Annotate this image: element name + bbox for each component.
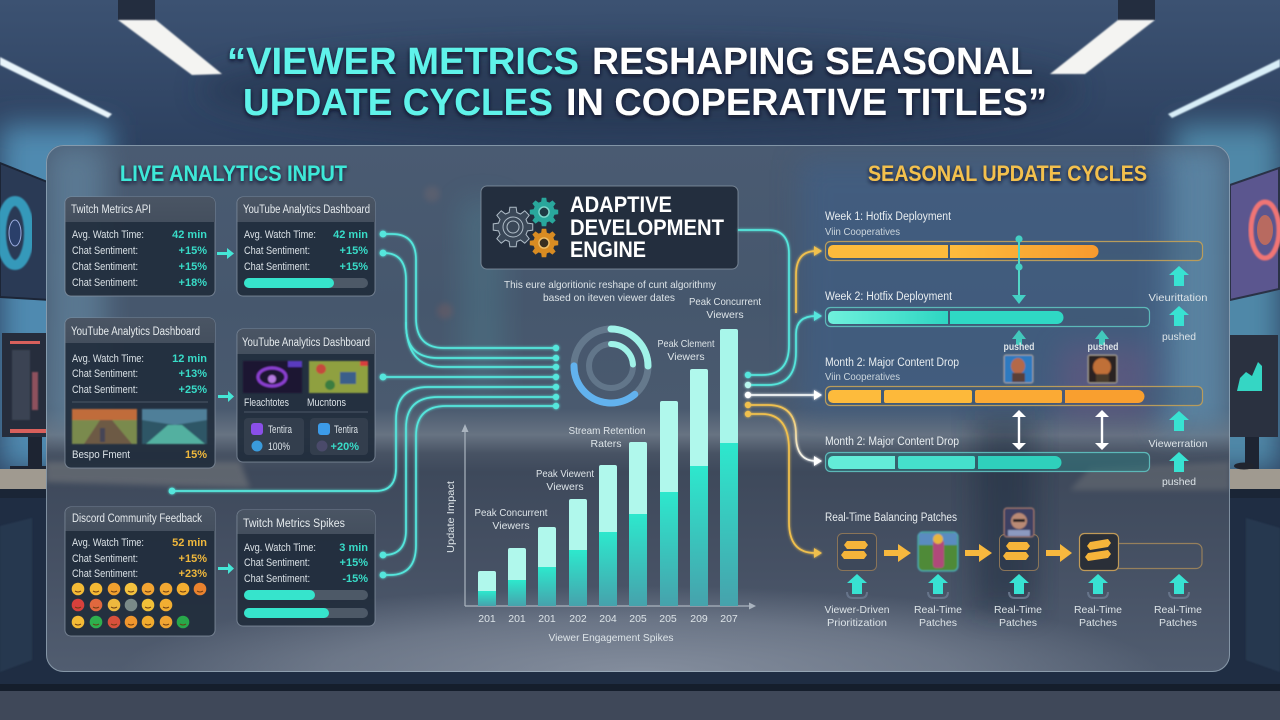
chart tick labels: 207	[720, 613, 738, 625]
bar callout labels: Peak Clement	[658, 338, 715, 350]
timeline: week 1 hotfix deployment: Viin Cooperatives	[825, 226, 900, 238]
main glass panel	[46, 145, 1230, 672]
bar callout labels	[474, 296, 761, 532]
bar callout labels: Peak Viewent	[536, 468, 594, 480]
chart tick labels: 201	[538, 613, 556, 625]
card: YouTube Analytics Dashboard with thumbnails: Chat Sentiment:	[72, 368, 138, 380]
thumbnail: purple vortex	[243, 361, 302, 393]
thumbnail: colourful battlefield	[309, 361, 368, 393]
card: YouTube Analytics Dashboard with progress bar: Chat Sentiment:	[244, 245, 310, 257]
patch label: viewer-driven prioritization: Prioritization	[827, 617, 887, 629]
icon: teal gear	[530, 198, 558, 226]
timeline: week 1 hotfix deployment	[825, 211, 1202, 260]
y axis title: Update Impact	[445, 481, 457, 553]
avatar: orange beast character	[1088, 355, 1117, 383]
bar callout labels: Viewers	[667, 351, 705, 363]
card: Twitch Metrics Spikes: Chat Sentiment:	[244, 573, 310, 585]
card: YouTube Analytics Dashboard with thumbnails	[65, 318, 215, 468]
viewer iteration indicator, lower: pushed	[1162, 476, 1196, 488]
patch flow	[838, 508, 1202, 571]
card: Twitch Metrics API	[65, 197, 215, 296]
title: UPDATE CYCLES	[243, 82, 553, 124]
card: Twitch Metrics Spikes: +15%	[340, 557, 368, 569]
card: Discord Community Feedback with emoji grid: Chat Sentiment:	[72, 553, 138, 565]
bar callout labels: Peak Concurrent	[689, 296, 761, 308]
patch label: real-time patches 4: Real-Time	[1154, 604, 1202, 616]
card: Twitch Metrics API: 42 min	[172, 229, 207, 241]
card: YouTube Analytics Dashboard with progress bar: +15%	[340, 245, 368, 257]
pushed marker with avatar 2	[1088, 330, 1118, 383]
bar callout labels: Viewers	[492, 520, 530, 532]
title: “VIEWER METRICS	[227, 41, 579, 83]
patch label: real-time patches 1	[914, 574, 962, 629]
card: Twitch Metrics Spikes: Twitch Metrics Spikes	[243, 518, 345, 530]
card: Discord Community Feedback with emoji grid: Avg. Watch Time:	[72, 537, 144, 549]
card: Twitch Metrics Spikes: Chat Sentiment:	[244, 557, 310, 569]
arrow: Twitch card to YouTube card	[217, 248, 234, 259]
chart tick labels: 202	[569, 613, 587, 625]
title	[227, 41, 1047, 124]
bar chart: viewer engagement spikes	[445, 296, 761, 644]
engine description: This eure algoritionic reshape of cunt algorithmy	[504, 279, 717, 291]
patch label: real-time patches 4: Patches	[1159, 617, 1197, 629]
title: IN COOPERATIVE TITLES”	[566, 82, 1047, 124]
card: Twitch Metrics Spikes: 3 min	[339, 542, 368, 554]
arrows between steps	[884, 544, 1072, 562]
chart bars	[478, 329, 738, 606]
chart axes	[462, 424, 756, 610]
pushed marker with avatar 1	[1004, 330, 1034, 383]
heading: live analytics input: LIVE ANALYTICS INPUT	[120, 161, 347, 186]
card: YouTube dashboard with media and platform tiles	[237, 329, 375, 462]
timeline: week 2 hotfix deployment: Week 2: Hotfix Deployment	[825, 291, 953, 303]
patch label: viewer-driven prioritization: Viewer-Driven	[824, 604, 890, 616]
bar callout labels: Raters	[591, 438, 621, 450]
tile: right platform stats: Tentira	[334, 424, 359, 436]
chart tick labels: 204	[599, 613, 617, 625]
chart tick labels: 205	[629, 613, 647, 625]
pushed marker with avatar 2: pushed	[1088, 341, 1118, 353]
viewer iteration indicator, top: pushed	[1162, 331, 1196, 343]
card: Discord Community Feedback with emoji grid: +15%	[179, 553, 207, 565]
card: Twitch Metrics API: Chat Sentiment:	[72, 245, 138, 257]
bar callout labels: Viewers	[706, 309, 744, 321]
patch label: real-time patches 2: Real-Time	[994, 604, 1042, 616]
card: YouTube Analytics Dashboard with thumbnails: +25%	[179, 384, 207, 396]
card: YouTube Analytics Dashboard with progress bar	[237, 197, 375, 296]
panel: adaptive development engine: ENGINE	[570, 237, 646, 262]
viewer iteration indicator, top	[1148, 266, 1208, 343]
tile: right platform stats: +20%	[331, 441, 359, 453]
arrow: YouTube card to thumbnail card	[218, 391, 234, 402]
pushed marker with avatar 1: pushed	[1004, 341, 1034, 353]
timeline: month 2 major content drop, teal	[825, 436, 1150, 472]
card: YouTube Analytics Dashboard with thumbnails: YouTube Analytics Dashboard	[71, 326, 200, 338]
bar callout labels: Viewers	[546, 481, 584, 493]
card: Twitch Metrics Spikes	[237, 510, 375, 626]
card: Twitch Metrics API: Avg. Watch Time:	[72, 229, 144, 241]
engine description: based on iteven viewer dates	[543, 292, 675, 304]
card: Twitch Metrics API: Chat Sentiment:	[72, 261, 138, 273]
card: YouTube dashboard with media and platform tiles: Mucntons	[307, 397, 346, 409]
card: Twitch Metrics API: Twitch Metrics API	[71, 204, 151, 216]
engine description	[504, 279, 717, 304]
card: Twitch Metrics API: +15%	[179, 261, 207, 273]
panel: adaptive development engine: DEVELOPMENT	[570, 215, 725, 240]
tile: right platform stats	[310, 418, 368, 455]
step 1: signpost tile	[838, 534, 876, 570]
card: YouTube Analytics Dashboard with progress bar: 42 min	[333, 229, 368, 241]
timeline: week 2 hotfix deployment	[825, 291, 1150, 326]
panel: adaptive development engine: ADAPTIVE	[570, 192, 672, 217]
avatar: blue masked character	[1004, 355, 1033, 383]
timeline: week 1 hotfix deployment: Week 1: Hotfix Deployment	[825, 211, 952, 223]
card: Discord Community Feedback with emoji grid: +23%	[179, 568, 207, 580]
card: Discord Community Feedback with emoji grid	[65, 507, 215, 636]
connector wires: engine to update cycles	[738, 230, 822, 558]
tile: left platform stats	[244, 418, 304, 455]
card: Discord Community Feedback with emoji grid: 52 min	[172, 537, 207, 549]
card: YouTube Analytics Dashboard with progress bar: Chat Sentiment:	[244, 261, 310, 273]
card: Twitch Metrics API: +18%	[179, 277, 207, 289]
x axis title: Viewer Engagement Spikes	[548, 632, 674, 644]
card: Discord Community Feedback with emoji grid: Discord Community Feedback	[72, 513, 202, 525]
viewer iteration indicator, top: Vieurittation	[1148, 292, 1208, 304]
patch label: real-time patches 3: Patches	[1079, 617, 1117, 629]
timeline: month 2 major content drop, orange: Month 2: Major Content Drop	[825, 357, 959, 369]
tile: left platform stats: 100%	[268, 441, 290, 453]
card: YouTube Analytics Dashboard with thumbnails: 12 min	[172, 353, 207, 365]
patch label: real-time patches 3: Real-Time	[1074, 604, 1122, 616]
icon: orange gear	[530, 229, 558, 257]
icon: grey gear	[493, 207, 533, 247]
donut gauge	[559, 314, 663, 418]
title: RESHAPING SEASONAL	[592, 41, 1033, 83]
bar callout labels: Stream Retention	[568, 425, 646, 437]
card: YouTube dashboard with media and platform tiles: Fleachtotes	[244, 397, 289, 409]
chart tick labels: 201	[478, 613, 496, 625]
card: YouTube Analytics Dashboard with thumbnails: Bespo Fment	[72, 449, 130, 461]
heading: real-time balancing patches: Real-Time Balancing Patches	[825, 512, 957, 524]
tile: left platform stats: Tentira	[268, 424, 293, 436]
card: YouTube Analytics Dashboard with progress bar: YouTube Analytics Dashboard	[243, 204, 370, 216]
bar callout labels: Peak Concurrent	[474, 507, 548, 519]
step 2: game scene tile	[918, 532, 958, 571]
patch label: viewer-driven prioritization	[824, 574, 890, 629]
card: YouTube Analytics Dashboard with progress bar: +15%	[340, 261, 368, 273]
thumbnail: tunnel view	[142, 409, 207, 444]
heading: seasonal update cycles: SEASONAL UPDATE CYCLES	[868, 161, 1147, 186]
card: YouTube Analytics Dashboard with thumbnails: +13%	[179, 368, 207, 380]
patch label: real-time patches 2	[994, 574, 1042, 629]
timeline: month 2 major content drop, teal: Month 2: Major Content Drop	[825, 436, 959, 448]
step 3: signpost tile with avatar	[1000, 508, 1038, 570]
connector wires: inputs to engine	[169, 231, 559, 578]
chart tick labels: 201	[508, 613, 526, 625]
card: Twitch Metrics API: +15%	[179, 245, 207, 257]
card: YouTube Analytics Dashboard with thumbnails: Chat Sentiment:	[72, 384, 138, 396]
arrow: week 1 to week 2 link	[1012, 235, 1026, 304]
avatar: sunglasses character	[1004, 508, 1034, 537]
timeline: month 2 major content drop, orange: Viin Cooperatives	[825, 371, 900, 383]
patch label: real-time patches 4	[1154, 574, 1202, 629]
card: YouTube Analytics Dashboard with progress bar: Avg. Watch Time:	[244, 229, 316, 241]
chart tick labels	[478, 613, 738, 625]
card: Twitch Metrics Spikes: -15%	[342, 573, 368, 585]
patch label: real-time patches 3	[1074, 574, 1122, 629]
card: Twitch Metrics Spikes: Avg. Watch Time:	[244, 542, 316, 554]
card: YouTube Analytics Dashboard with thumbnails: 15%	[185, 449, 207, 461]
emoji grid	[72, 583, 206, 628]
chart tick labels: 205	[659, 613, 677, 625]
card: YouTube Analytics Dashboard with thumbnails: Avg. Watch Time:	[72, 353, 144, 365]
viewer iteration indicator, lower: Viewerration	[1148, 438, 1208, 450]
card: Discord Community Feedback with emoji grid: Chat Sentiment:	[72, 568, 138, 580]
viewer iteration indicator, lower	[1148, 411, 1208, 488]
arrow: Discord card to Twitch spikes card	[218, 563, 234, 574]
panel: adaptive development engine	[481, 186, 738, 269]
patch label: real-time patches 1: Patches	[919, 617, 957, 629]
card: YouTube dashboard with media and platform tiles: YouTube Analytics Dashboard	[242, 337, 370, 349]
chart tick labels: 209	[690, 613, 708, 625]
patch label: real-time patches 1: Real-Time	[914, 604, 962, 616]
thumbnail: race road	[72, 409, 137, 444]
patch label: real-time patches 2: Patches	[999, 617, 1037, 629]
arrows: double-headed links between month bars	[1012, 410, 1109, 450]
step 4: highlighted signpost tile with track	[1080, 534, 1202, 570]
card: Twitch Metrics API: Chat Sentiment:	[72, 277, 138, 289]
timeline: month 2 major content drop, orange	[825, 357, 1202, 406]
